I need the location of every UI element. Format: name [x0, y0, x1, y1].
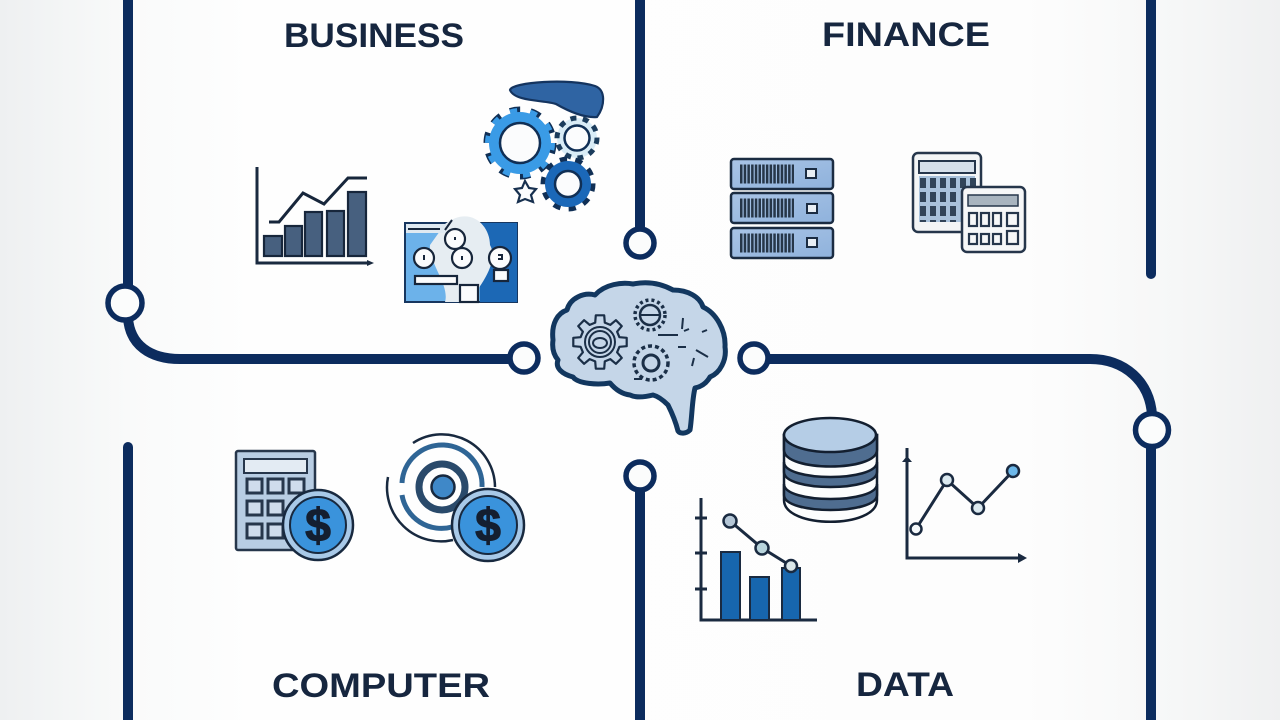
large calculator: [913, 153, 981, 232]
heading: computer: COMPUTER: [272, 667, 490, 705]
icon: business gears: [488, 82, 603, 208]
dollar coin: $: [305, 499, 331, 551]
icon: line chart: [902, 448, 1027, 563]
connector: right to brain: [769, 359, 1152, 415]
connector network: [128, 0, 1152, 720]
heading: finance: FINANCE: [822, 16, 990, 54]
icon: business bar chart with trend line: [257, 167, 374, 266]
icon: bar chart with falling line: [695, 498, 817, 620]
connector: top right: [1146, 0, 1156, 274]
icon: brain with gears: [553, 283, 725, 433]
node: top centre: [626, 229, 654, 257]
tiny star gear: [515, 181, 536, 202]
icon: database cylinder: [784, 418, 877, 522]
connector: lower centre: [635, 490, 645, 720]
heading: business: BUSINESS: [284, 17, 464, 55]
gear cap shape: [510, 82, 603, 117]
lower brain gear: [634, 346, 668, 380]
dollar coin: $: [475, 499, 501, 551]
heading: data science: DATA: [856, 666, 954, 704]
server unit 2: [731, 193, 833, 223]
connector: left to brain: [128, 318, 510, 359]
brain outline: [553, 283, 725, 433]
brain circuit dashes: [634, 318, 708, 379]
icon: target with dollar coin: [387, 434, 524, 561]
large brain gear: [573, 315, 627, 369]
icon: server stack: [731, 159, 833, 258]
connector: lower right: [1146, 446, 1156, 720]
node: right: [1136, 414, 1168, 446]
connector: top centre: [635, 0, 645, 229]
icon: finance calculators: [913, 153, 1025, 252]
node: left of brain: [510, 344, 538, 372]
dark blue gear: [544, 160, 592, 208]
concentric target rings: [387, 434, 495, 541]
calculator body: [236, 451, 315, 550]
connector: lower left: [123, 447, 133, 720]
connector: top left: [123, 0, 133, 288]
server unit 1: [731, 159, 833, 189]
upper brain gear: [635, 300, 665, 330]
small calculator: [962, 187, 1025, 252]
server unit 3: [731, 228, 833, 258]
node: right of brain: [740, 344, 768, 372]
node: lower centre: [626, 462, 654, 490]
large gear: [488, 111, 552, 175]
small gear: [557, 118, 597, 158]
connector nodes: [108, 229, 1168, 490]
icon: calculator with dollar coin: [236, 451, 353, 560]
icon: business team panel: [405, 216, 517, 302]
node: left: [108, 286, 142, 320]
